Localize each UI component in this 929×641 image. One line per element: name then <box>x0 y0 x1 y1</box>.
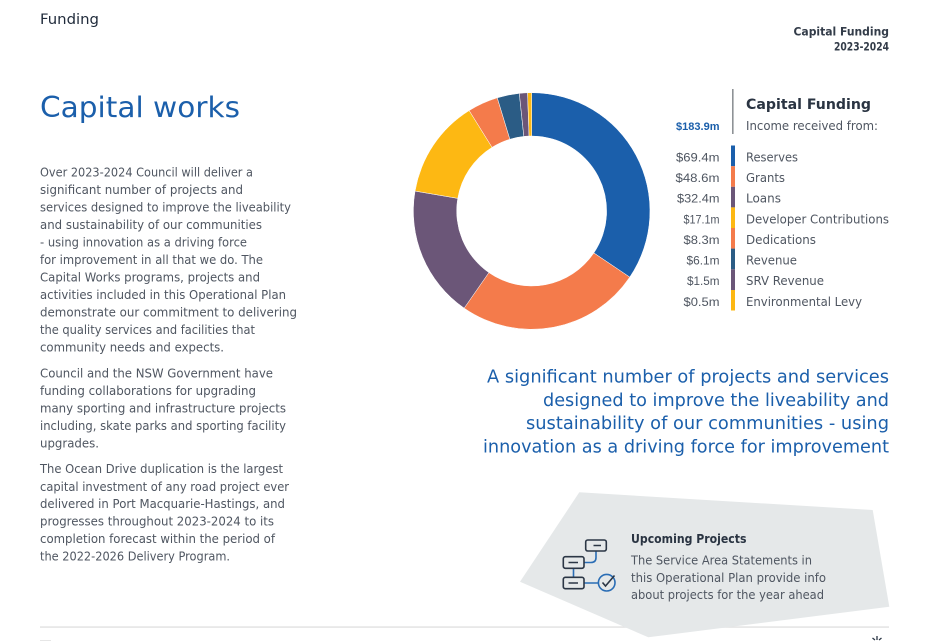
legend rows: $0.5m <box>684 295 720 309</box>
callout text: Upcoming Projects <box>631 532 746 546</box>
legend rows: $32.4m <box>677 192 720 206</box>
legend rows: $17.1m <box>684 212 720 226</box>
text block: body copy: Council and the NSW Government have <box>40 366 273 380</box>
legend rows: $6.1m <box>686 254 720 268</box>
legend rows: $48.6m <box>676 171 720 185</box>
text block: body copy: Over 2023-2024 Council will deliver a <box>40 166 253 180</box>
legend rows <box>676 150 889 309</box>
panel: upcoming projects <box>520 492 889 637</box>
legend rows: $69.4m <box>676 150 720 164</box>
text block: body copy: for improvement in all that we do. The <box>40 253 263 267</box>
title: Capital works <box>40 91 240 124</box>
text block: body copy: including, skate parks and sporting facility <box>40 419 286 433</box>
pull quote: sustainability of our communities - using <box>526 414 889 434</box>
text block: body copy: significant number of projects and <box>40 183 243 197</box>
text block: body copy: capital investment of any road project ever <box>40 480 290 494</box>
legend: capital funding <box>676 89 889 310</box>
header: Capital Funding 2023-2024 <box>794 24 889 54</box>
callout text: this Operational Plan provide info <box>631 571 826 585</box>
legend rows: Dedications <box>746 233 816 247</box>
legend rows: Loans <box>746 192 781 206</box>
text block: body copy: activities included in this Operational Plan <box>40 288 286 302</box>
text block: body copy: progresses throughout 2023-2024 to its <box>40 514 274 528</box>
text block: body copy: funding collaborations for upgrading <box>40 384 256 398</box>
text block: body copy: many sporting and infrastructure projects <box>40 402 286 416</box>
text block: body copy: - using innovation as a driving force <box>40 236 247 250</box>
header: Capital Funding 2023-2024: Capital Funding <box>794 24 889 38</box>
legend rows: SRV Revenue <box>746 274 824 288</box>
panel background <box>520 492 889 637</box>
legend colour bar <box>731 146 735 310</box>
legend rows: Grants <box>746 171 785 185</box>
pull quote: A significant number of projects and services <box>487 368 889 388</box>
callout text <box>630 532 826 602</box>
pull quote: innovation as a driving force for improvement <box>483 438 889 458</box>
legend heading: Capital Funding <box>746 96 871 113</box>
text block: body copy: services designed to improve the liveability <box>40 200 291 214</box>
section label: Funding: Funding <box>40 12 99 28</box>
text block: body copy: The Ocean Drive duplication is the largest <box>39 462 283 476</box>
legend heading: $183.9m <box>676 121 720 133</box>
text block: body copy <box>39 166 297 564</box>
legend rows: Developer Contributions <box>746 212 889 226</box>
footer rule <box>40 626 889 628</box>
legend rows: Reserves <box>746 150 798 164</box>
text block: body copy: the 2022-2026 Delivery Program. <box>40 550 230 564</box>
text block: body copy: completion forecast within the period of <box>40 532 276 546</box>
legend rows: Environmental Levy <box>746 295 862 309</box>
text block: body copy: upgrades. <box>40 436 99 450</box>
donut chart <box>413 93 650 329</box>
callout text: The Service Area Statements in <box>630 554 812 568</box>
text block: body copy: and sustainability of our communities <box>40 218 262 232</box>
legend heading: Income received from: <box>746 119 878 133</box>
legend rows: Revenue <box>746 254 797 268</box>
pull quote: designed to improve the liveability and <box>543 391 889 411</box>
icon: footer logo <box>872 636 882 640</box>
header: Capital Funding 2023-2024: 2023-2024 <box>834 40 889 54</box>
legend rows: $1.5m <box>687 274 720 288</box>
text block: body copy: delivered in Port Macquarie-Hastings, and <box>40 497 285 511</box>
callout text: about projects for the year ahead <box>631 588 824 602</box>
legend rows: $8.3m <box>684 233 720 247</box>
legend heading <box>676 89 878 134</box>
text block: body copy: Capital Works programs, projects and <box>40 270 260 284</box>
page number <box>40 640 51 641</box>
text block: body copy: the quality services and facilities that <box>40 323 255 337</box>
pull quote <box>483 368 889 458</box>
text block: body copy: demonstrate our commitment to delivering <box>40 306 297 320</box>
icon: project flow <box>563 540 615 591</box>
text block: body copy: community needs and expects. <box>40 340 224 354</box>
